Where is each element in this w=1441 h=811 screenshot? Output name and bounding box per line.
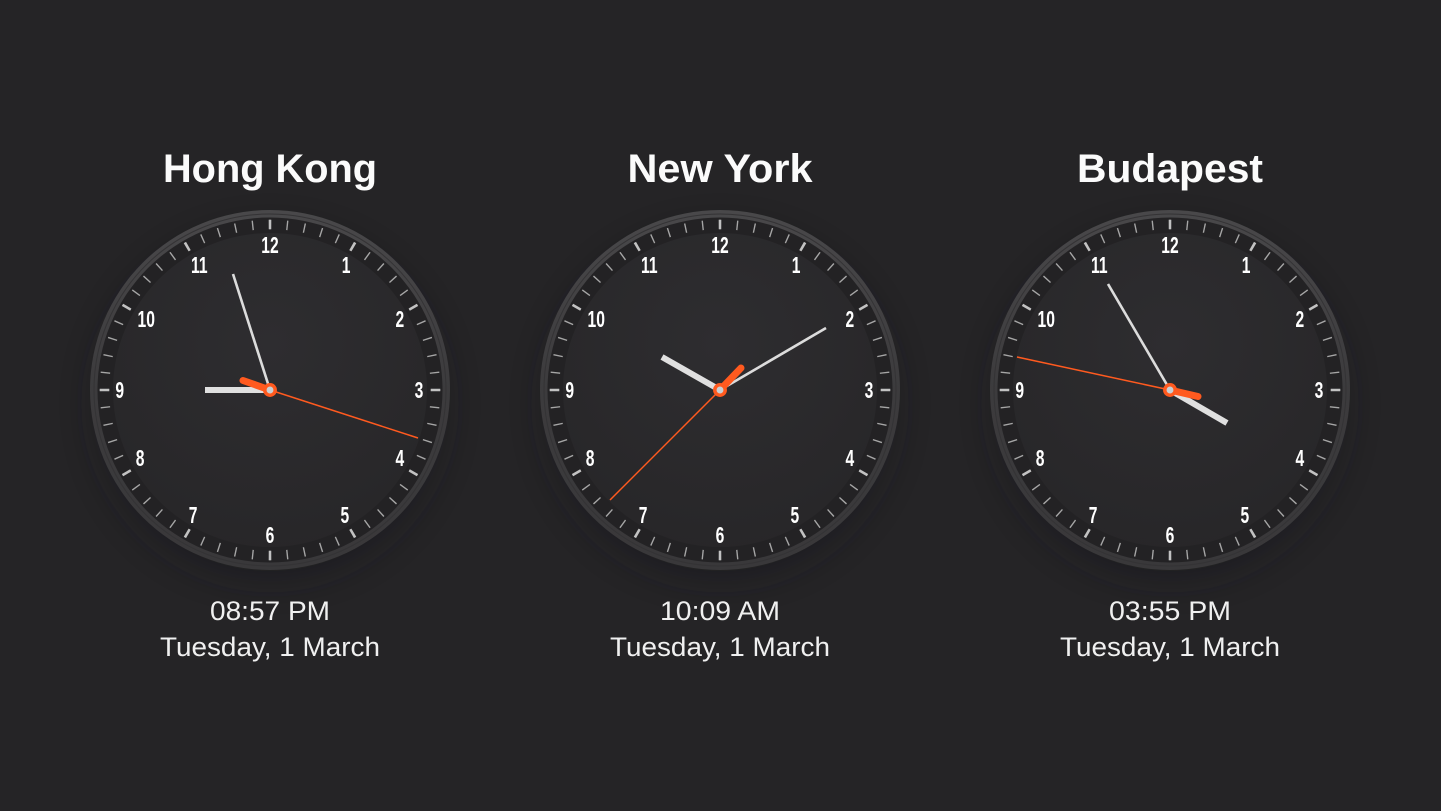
- clock dial: Hong Kong: 6: [266, 523, 274, 549]
- clock dial: New York: 11: [641, 253, 658, 279]
- time and date: Budapest: Tuesday, 1 March: [1060, 632, 1280, 662]
- clock dial: Budapest: 12: [1161, 233, 1179, 259]
- clock dial: Budapest: 7: [1089, 503, 1098, 529]
- clock dial: Hong Kong: 8: [136, 446, 145, 472]
- time and date: New York: Tuesday, 1 March: [610, 632, 830, 662]
- clock dial: Hong Kong: 7: [189, 503, 198, 529]
- clock dial: Budapest: 2: [1296, 307, 1304, 333]
- time and date: Hong Kong: [160, 596, 380, 662]
- clock dial: New York: 12: [711, 233, 729, 259]
- clock dial: New York: 3: [865, 378, 873, 404]
- clock dial: Hong Kong: 2: [396, 307, 404, 333]
- time and date: Hong Kong: 08:57 PM: [210, 596, 330, 626]
- clock hands: Hong Kong: [205, 274, 418, 438]
- heading: Budapest: Budapest: [1077, 147, 1263, 191]
- clock dial: Budapest: 1: [1242, 253, 1251, 279]
- clock dial: New York: 4: [846, 446, 854, 472]
- clock dial: Budapest: 10: [1038, 307, 1055, 333]
- clock dial: Hong Kong: 5: [340, 503, 349, 529]
- panel: Budapest clock: [990, 147, 1350, 662]
- clock dial: Hong Kong: 3: [415, 378, 423, 404]
- clock dial: Budapest: 9: [1015, 378, 1024, 404]
- clock hands: Budapest: [1017, 284, 1227, 423]
- clock dial: Budapest: [990, 210, 1350, 582]
- clock dial: New York: 2: [846, 307, 854, 333]
- heading: Hong Kong: Hong Kong: [163, 147, 377, 191]
- time and date: New York: [610, 596, 830, 662]
- heading: New York: New York: [628, 147, 813, 191]
- clock dial: New York: 5: [790, 503, 799, 529]
- clock dial: Hong Kong: 12: [261, 233, 279, 259]
- time and date: Hong Kong: Tuesday, 1 March: [160, 632, 380, 662]
- clock dial: New York: 7: [639, 503, 648, 529]
- clock dial: New York: 10: [588, 307, 605, 333]
- clock dial: New York: [540, 210, 900, 582]
- clock dial: Hong Kong: 10: [138, 307, 155, 333]
- clock dial: Hong Kong: 9: [115, 378, 124, 404]
- clock dial: Hong Kong: 4: [396, 446, 404, 472]
- clock dial: New York: 6: [716, 523, 724, 549]
- clock dial: Budapest: 11: [1091, 253, 1108, 279]
- clock dial: New York: 8: [586, 446, 595, 472]
- clock dial: Budapest: 3: [1315, 378, 1323, 404]
- clock dial: Budapest: 8: [1036, 446, 1045, 472]
- clock dial: Budapest: 5: [1240, 503, 1249, 529]
- clock dial: Budapest: 6: [1166, 523, 1174, 549]
- clock hands: New York: [610, 328, 826, 500]
- panel: Hong Kong clock: [90, 147, 450, 662]
- clock dial: Budapest: 4: [1296, 446, 1304, 472]
- time and date: Budapest: [1060, 596, 1280, 662]
- clock dial: Hong Kong: [90, 210, 450, 582]
- clock dial: New York: 1: [792, 253, 801, 279]
- clock dial: Hong Kong: 1: [342, 253, 351, 279]
- panel: New York clock: [540, 147, 900, 662]
- clock dial: New York: 9: [565, 378, 574, 404]
- time and date: Budapest: 03:55 PM: [1109, 596, 1231, 626]
- clock dial: Hong Kong: 11: [191, 253, 208, 279]
- time and date: New York: 10:09 AM: [660, 596, 780, 626]
